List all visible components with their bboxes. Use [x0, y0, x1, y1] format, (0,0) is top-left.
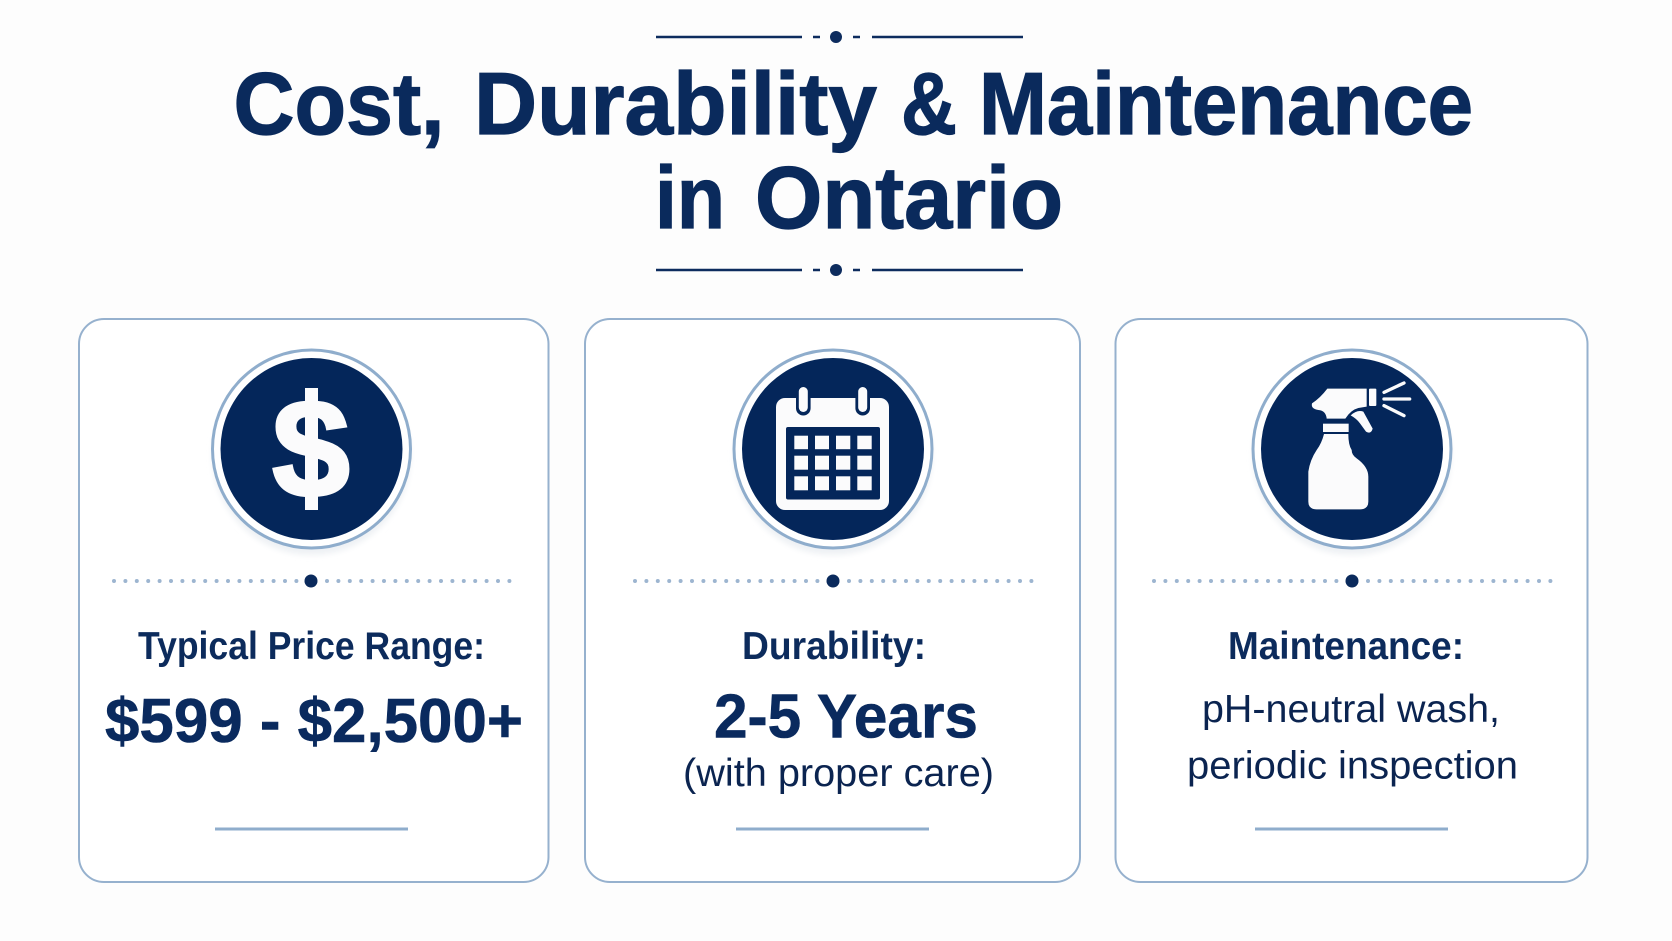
title: in [655, 148, 725, 247]
dotted divider [635, 574, 1033, 588]
bottom ornament [656, 264, 1023, 276]
top ornament [656, 31, 1023, 43]
bottom rule [736, 828, 929, 830]
title: Durability [474, 54, 877, 153]
note: with proper care: (with proper care) [683, 752, 994, 795]
dotted divider [1154, 574, 1552, 588]
label: price range: Typical Price Range: [138, 625, 485, 668]
panel: durability [585, 319, 1080, 882]
icon: dollar sign: $ [272, 370, 350, 527]
title: & [901, 54, 957, 153]
text: inspection: periodic inspection [1187, 744, 1518, 788]
bottom rule [215, 828, 408, 830]
value: years: 2-5 Years [714, 682, 978, 752]
text: wash: pH-neutral wash, [1202, 688, 1500, 731]
title: Ontario [755, 148, 1063, 247]
icon: spray bottle [1253, 350, 1451, 555]
dotted divider [114, 574, 511, 588]
title [234, 54, 1473, 247]
title: Cost, [234, 54, 444, 153]
icon: dollar sign [212, 350, 410, 555]
label: maintenance: Maintenance: [1228, 625, 1464, 668]
title: Maintenance [979, 54, 1473, 153]
bottom rule [1255, 828, 1448, 830]
panel: cost [79, 319, 548, 882]
panel: maintenance [1116, 319, 1588, 882]
value: price: $599 - $2,500+ [105, 687, 523, 756]
label: durability: Durability: [742, 625, 926, 668]
icon: calendar [734, 350, 932, 555]
